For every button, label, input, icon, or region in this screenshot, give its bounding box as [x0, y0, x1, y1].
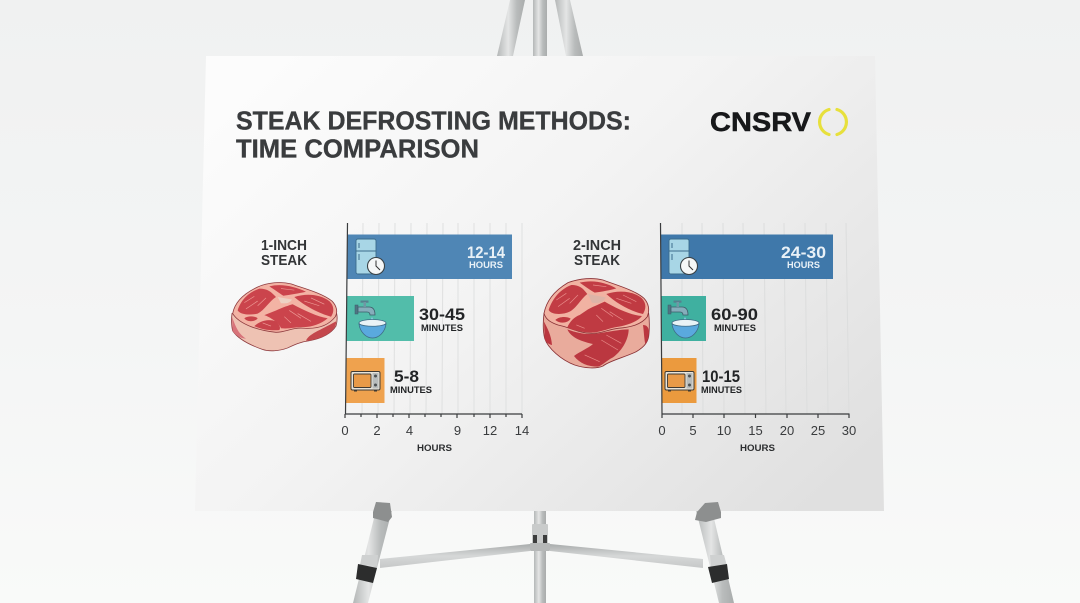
- heading: 1-inch steak: STEAK: [261, 252, 307, 269]
- x axis tick labels: 0: [341, 423, 349, 438]
- label: 12-14 hours: 12-14: [467, 243, 505, 262]
- board clamps: [373, 502, 721, 522]
- logo ring: [820, 110, 846, 134]
- grid lines: [682, 223, 849, 414]
- heading: 2-inch steak: STEAK: [574, 252, 620, 269]
- x axis tick labels: 20: [780, 423, 794, 438]
- axes: [660, 223, 850, 418]
- axes: [345, 223, 522, 418]
- x axis tick labels: [341, 423, 529, 438]
- icon: fridge and clock: [669, 239, 698, 274]
- icon: faucet and bowl: [668, 300, 699, 338]
- label: 30-45 minutes: MINUTES: [421, 323, 463, 334]
- left leg: [353, 510, 392, 603]
- x axis title: HOURS: [417, 443, 452, 454]
- title: STEAK DEFROSTING METHODS:: [236, 108, 631, 136]
- label: 5-8 minutes: MINUTES: [390, 385, 432, 396]
- label: 10-15 minutes: [701, 367, 742, 396]
- display board: [195, 56, 884, 511]
- label: 5-8 minutes: [390, 367, 432, 396]
- x axis tick labels: 10: [717, 423, 731, 438]
- bar chart: 2-inch steak: [658, 223, 856, 454]
- label: 60-90 minutes: [711, 305, 758, 334]
- x axis tick labels: 9: [454, 423, 461, 438]
- icon: 1-inch raw steak: [232, 283, 337, 351]
- label: 60-90 minutes: 60-90: [711, 305, 758, 324]
- label: 60-90 minutes: MINUTES: [714, 323, 756, 334]
- label: 30-45 minutes: [419, 305, 465, 334]
- x axis title: HOURS: [740, 443, 775, 454]
- grid lines: [362, 223, 522, 414]
- title: TIME COMPARISON: [236, 136, 479, 164]
- heading: 1-inch steak: [261, 237, 307, 269]
- right leg: [696, 510, 734, 603]
- heading: 2-inch steak: 2-INCH: [573, 237, 621, 254]
- panel: 1-inch steak: [232, 223, 529, 454]
- x axis tick labels: 14: [515, 423, 529, 438]
- bar: fridge 24-30 hours: [661, 234, 833, 279]
- easel top legs: [497, 0, 583, 56]
- panel: 2-inch steak: [543, 223, 856, 454]
- x axis tick labels: 5: [689, 423, 697, 438]
- icon: microwave: [665, 372, 694, 392]
- x axis tick labels: 30: [842, 423, 856, 438]
- label: 30-45 minutes: 30-45: [419, 305, 465, 324]
- bar: cold water 30-45 minutes: [346, 296, 414, 341]
- x axis tick labels: 2: [373, 423, 381, 438]
- heading: 1-inch steak: 1-INCH: [261, 237, 307, 254]
- easel lower frame: [353, 510, 734, 603]
- label: 12-14 hours: [467, 243, 505, 271]
- x axis tick labels: 15: [748, 423, 763, 438]
- bar: microwave 5-8 minutes: [346, 358, 384, 403]
- label: 24-30 hours: HOURS: [787, 260, 820, 271]
- centre pole: [530, 511, 550, 603]
- title: [236, 108, 631, 164]
- icon: fridge and clock: [356, 239, 384, 274]
- bar: microwave 10-15 minutes: [662, 358, 696, 403]
- icon: 2-inch raw steak: [543, 279, 649, 368]
- label: 12-14 hours: HOURS: [469, 260, 503, 271]
- label: 24-30 hours: [781, 243, 826, 271]
- cross braces: [380, 544, 703, 568]
- label: 24-30 hours: 24-30: [781, 243, 826, 262]
- logo: [710, 107, 846, 137]
- bar chart: 1-inch steak: [341, 223, 529, 454]
- label: 5-8 minutes: 5-8: [394, 367, 419, 386]
- bar: fridge 12-14 hours: [347, 234, 512, 279]
- icon: faucet and bowl: [355, 300, 386, 338]
- heading: 2-inch steak: [573, 237, 621, 269]
- icon: microwave: [351, 372, 380, 392]
- x axis tick labels: 12: [483, 423, 497, 438]
- label: 10-15 minutes: 10-15: [702, 367, 740, 386]
- x axis tick labels: 25: [811, 423, 825, 438]
- bar: cold water 60-90 minutes: [661, 296, 706, 341]
- logo wordmark: CNSRV: [710, 107, 811, 137]
- x axis tick labels: 0: [658, 423, 666, 438]
- x axis tick labels: [658, 423, 856, 438]
- label: 10-15 minutes: MINUTES: [701, 385, 742, 396]
- x axis tick labels: 4: [406, 423, 413, 438]
